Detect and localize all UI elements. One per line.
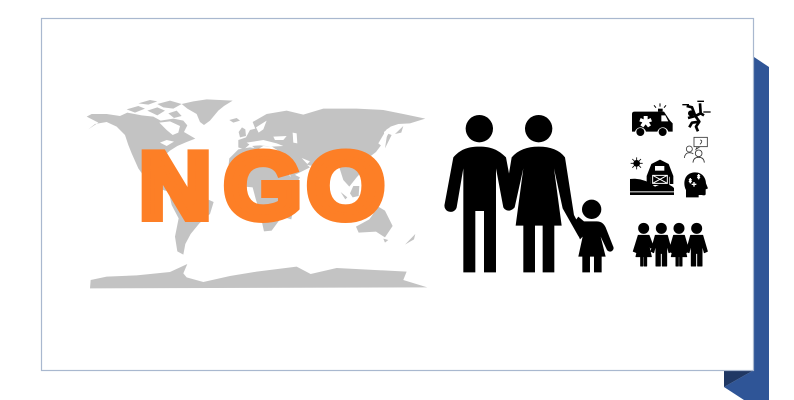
- child 2: [651, 223, 672, 266]
- child: [573, 200, 614, 272]
- arabia: [280, 153, 310, 177]
- world map: [87, 99, 427, 288]
- icon: ambulance: [632, 103, 673, 136]
- icon: people and speech bubble: [684, 137, 707, 163]
- icons: small NGO services: [630, 101, 711, 266]
- icon: drone person: [682, 101, 711, 131]
- north america: [87, 113, 195, 192]
- child 3: [669, 223, 689, 266]
- arctic islands: [127, 100, 182, 118]
- greenland: [182, 99, 233, 125]
- father: [444, 115, 515, 272]
- eurasia: [238, 109, 425, 187]
- icon: sun: [631, 157, 643, 169]
- japan, new zealand, tasmania: [383, 126, 415, 245]
- antarctica: [90, 264, 427, 288]
- africa: [227, 147, 300, 231]
- iceland and uk: [229, 118, 246, 137]
- mother: [504, 115, 583, 272]
- icon: head with puzzle: [684, 172, 708, 197]
- title: NGO: NGO: [139, 133, 384, 238]
- water details: [159, 121, 393, 177]
- south america: [169, 187, 214, 255]
- child 4: [686, 223, 707, 266]
- australia: [356, 207, 393, 237]
- white panel: [42, 18, 754, 370]
- child 1: [633, 223, 653, 266]
- southeast asia islands: [341, 169, 370, 201]
- icon: barn and hills: [630, 160, 674, 195]
- icon: family: [444, 115, 614, 272]
- blue ribbon behind panel: [724, 57, 769, 400]
- madagascar: [287, 203, 295, 219]
- icon: four children: [633, 223, 707, 266]
